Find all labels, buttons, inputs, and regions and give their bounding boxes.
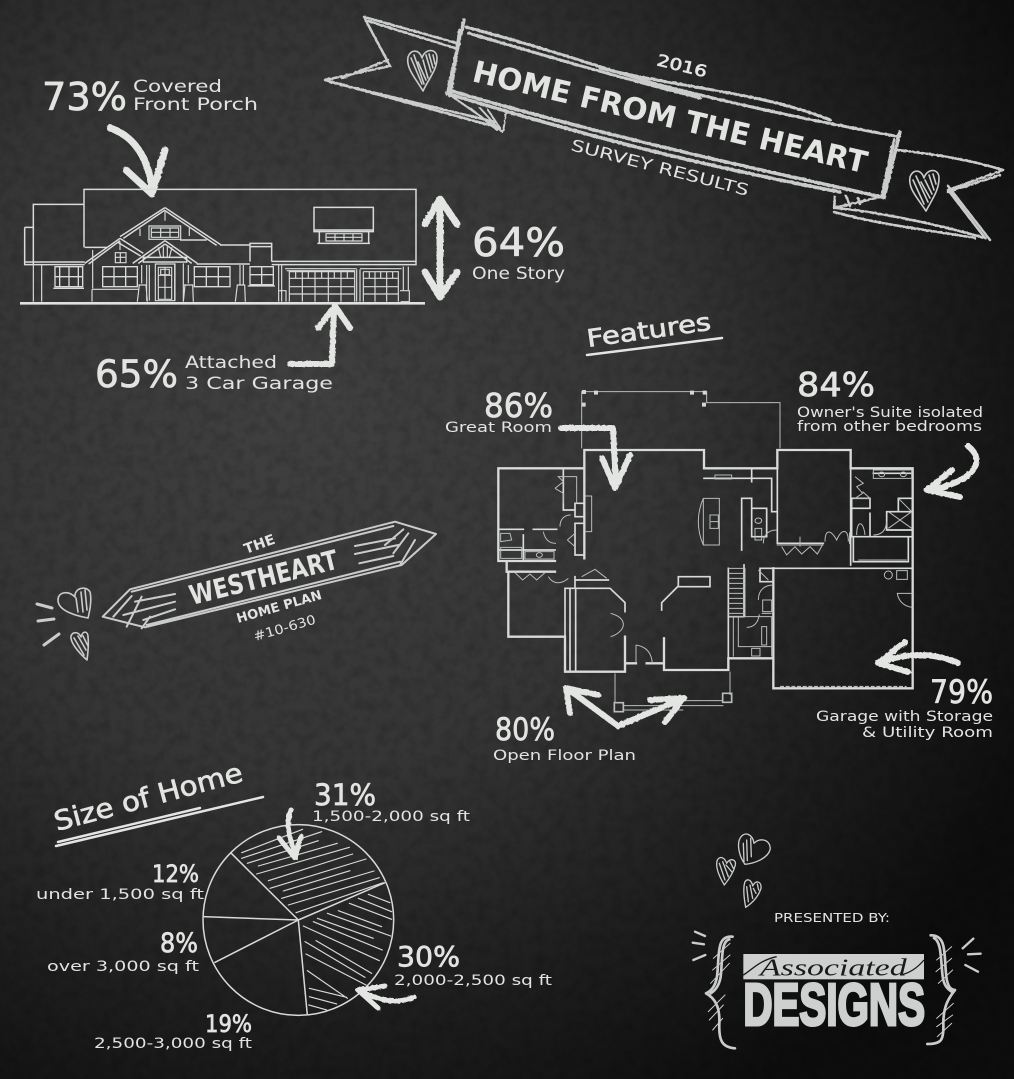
right eaves: [272, 259, 416, 264]
stat: 73% covered front porch: 73%: [42, 75, 127, 119]
ground line: [20, 299, 425, 307]
pie label: 31%: 1,500-2,000 sq ft: [312, 809, 471, 825]
left brace hatching: [708, 943, 730, 1030]
stat: 86% great room: Great Room: [445, 420, 552, 436]
logo: associated script: Associated: [757, 956, 908, 982]
front porch posts: [614, 693, 732, 712]
stat: 84% owner's suite: from other bedrooms: [797, 419, 982, 435]
pie label: 8%: [47, 928, 200, 975]
pie label: 19%: 19%: [205, 1010, 252, 1038]
the westheart plan ribbon: HOME PLAN: [235, 588, 324, 627]
stat: 64% one story: One Story: [472, 264, 565, 284]
heading: features: [585, 308, 722, 355]
hatch: 30% slice: [303, 894, 392, 1010]
large outline heart: [58, 588, 91, 618]
rays: [693, 932, 981, 972]
icon: left heart: [408, 50, 437, 91]
stat: 80% open floor plan: Open Floor Plan: [493, 748, 636, 764]
logo: swashes: [743, 957, 924, 975]
pie label: 31%: [312, 778, 471, 825]
arrow: open floor plan: [566, 688, 684, 726]
right brace hatching: [936, 947, 953, 1037]
gables: [85, 208, 250, 264]
stat: 73% covered front porch: [42, 75, 258, 119]
exterior walls: [498, 450, 913, 688]
pie label: 12%: [36, 860, 205, 903]
arrow: to garage: [290, 306, 350, 364]
chimney: [250, 243, 272, 262]
arrow: to roof porch: [110, 128, 165, 194]
right brace: [927, 935, 955, 1044]
the westheart plan ribbon: WESTHEART: [186, 545, 342, 612]
pie label: 12%: 12%: [152, 860, 199, 888]
floor plan: [498, 390, 913, 712]
stat: 84% owner's suite: 84%: [797, 365, 875, 404]
plumbing fixtures: [536, 472, 906, 579]
stat: 79% garage: [816, 673, 993, 741]
posts and porch: [33, 250, 409, 302]
stat: 86% great room: 86%: [484, 386, 553, 425]
rear porch: [582, 392, 780, 448]
pie chart: size of home: [203, 825, 394, 1015]
small hatched heart: [71, 632, 88, 660]
front door: [155, 264, 175, 301]
double arrow: height: [425, 199, 457, 297]
stat: 86% great room: [445, 386, 553, 436]
arrow: owner's suite: [927, 446, 977, 497]
stat: 65% attached garage: [95, 353, 333, 396]
stat: 64% one story: 64%: [472, 221, 565, 266]
stat: 73% covered front porch: Front Porch: [133, 95, 258, 115]
stat: 65% attached garage: Attached: [185, 353, 277, 373]
ribbon texts: THE: [242, 532, 277, 558]
interior walls: [498, 450, 913, 672]
the westheart plan ribbon: [103, 522, 436, 645]
arrow: great room: [561, 428, 630, 488]
banner title: HOME FROM THE HEART: [469, 55, 871, 181]
garage doors: [285, 269, 402, 302]
ribbon outline: [103, 522, 436, 628]
pie label: 30%: 30%: [397, 940, 460, 973]
garage door: [780, 684, 907, 689]
arrow: garage storage: [878, 642, 958, 672]
presented by block: [693, 834, 981, 1048]
arrow: 30% slice: [358, 986, 414, 1008]
stat: 79% garage: 79%: [930, 673, 993, 711]
porch posts: [582, 390, 707, 407]
icon: right heart: [910, 170, 939, 211]
pie label: 30%: 2,000-2,500 sq ft: [394, 973, 553, 989]
stat: 79% garage: & Utility Room: [862, 725, 993, 741]
pie label: 31%: 31%: [314, 778, 376, 812]
stat: 80% open floor plan: [493, 712, 636, 764]
stat: 64% one story: [472, 221, 565, 284]
pie label: 19%: 2,500-3,000 sq ft: [94, 1036, 253, 1052]
logo: associated band: [743, 954, 924, 979]
pie label: 30%: [394, 940, 553, 989]
logo: designs wordmark: DESIGNS: [743, 971, 925, 1038]
icon: westheart hearts: [37, 588, 91, 660]
dormer: [314, 207, 373, 243]
pie label: 8%: 8%: [160, 928, 198, 959]
stat: 84% owner's suite: Owner's Suite isolated: [797, 405, 983, 421]
heading: features: Features: [585, 308, 713, 353]
the westheart plan ribbon: #10-630: [252, 613, 318, 645]
pie label: 19%: [94, 1010, 253, 1052]
stairs: [728, 568, 745, 617]
house elevation drawing: [20, 189, 425, 303]
pie label: 8%: over 3,000 sq ft: [47, 959, 200, 975]
hatch: 31% slice: [242, 829, 383, 913]
stat: 65% attached garage: 3 Car Garage: [185, 374, 333, 394]
arrow: 31% slice: [279, 810, 301, 858]
closet zigzags: [515, 477, 870, 580]
year: 2016: [655, 50, 709, 81]
heading: size of home: Size of Home: [51, 758, 246, 838]
thin fixtures and doors: [501, 470, 913, 710]
main roof: [84, 189, 416, 265]
rays: [37, 604, 59, 645]
stat: 80% open floor plan: 80%: [495, 712, 555, 748]
left brace: [706, 937, 735, 1048]
windows: [53, 267, 275, 288]
subtitle: SURVEY RESULTS: [569, 135, 751, 200]
stat: 84% owner's suite: [797, 365, 983, 435]
ribbon drawing: [325, 17, 1003, 240]
title ribbon banner: [325, 17, 1003, 240]
pie label: 12%: under 1,500 sq ft: [36, 887, 205, 903]
circle and slices: [203, 825, 394, 1015]
stat: 65% attached garage: 65%: [95, 353, 178, 396]
presented by text: PRESENTED BY:: [774, 910, 890, 925]
left wing: [25, 204, 107, 265]
stat: 79% garage: Garage with Storage: [816, 709, 993, 725]
icon: three hearts: [717, 834, 770, 907]
stat: 73% covered front porch: Covered: [133, 77, 222, 97]
